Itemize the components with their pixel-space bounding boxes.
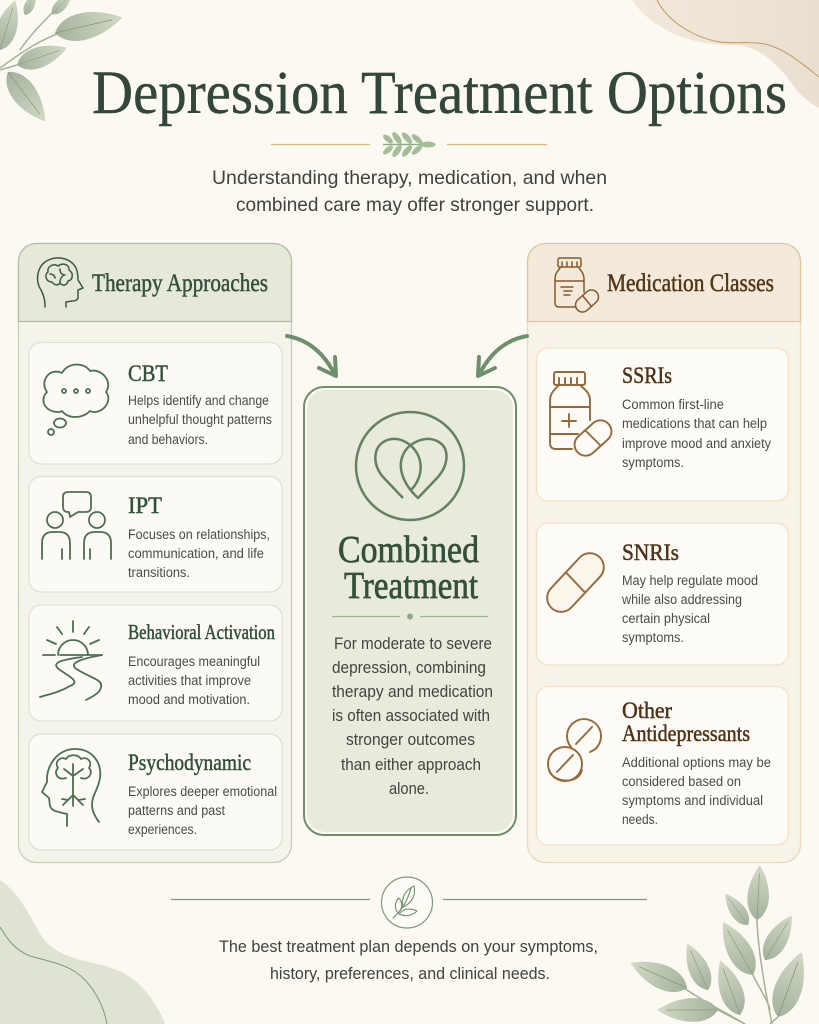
text: psychodynamic: Explores deeper emotional: [128, 784, 277, 799]
arrow: therapy to combined: [287, 336, 336, 376]
title divider with sprig: [271, 131, 547, 158]
text: other antidepressants: needs.: [622, 812, 658, 827]
footer text: The best treatment plan depends on your symptoms,: [219, 937, 598, 956]
icon: leaf sprig: [393, 886, 417, 918]
illustration: bottom right leaves: [625, 865, 814, 1024]
text: SSRIs: medications that can help: [622, 416, 767, 431]
text: CBT: unhelpful thought patterns: [128, 412, 272, 427]
card: other antidepressants: [536, 686, 788, 845]
panel: therapy approaches: [18, 244, 292, 862]
panel: medication classes: [528, 244, 800, 862]
text: IPT: communication, and life: [128, 546, 264, 561]
text: combined treatment description: is often associated with: [332, 707, 490, 725]
text: psychodynamic: experiences.: [128, 822, 197, 837]
icon: sunrise and path: [40, 621, 102, 700]
text: behavioral activation: Behavioral Activation: [128, 620, 275, 644]
card: behavioral activation: [29, 605, 282, 721]
text: other antidepressants: symptoms and individual: [622, 793, 763, 808]
decorative blob: bottom left: [0, 880, 165, 1024]
text: psychodynamic: Psychodynamic: [128, 750, 251, 775]
icon: capsule: [541, 547, 610, 618]
text: CBT: Helps identify and change: [128, 393, 269, 408]
icon: head with brain: [38, 258, 83, 307]
text: SNRIs: SNRIs: [622, 540, 679, 565]
heading: combined treatment: Treatment: [344, 565, 478, 607]
text: SSRIs: symptoms.: [622, 455, 684, 470]
footer text: [219, 937, 598, 983]
text: SSRIs: SSRIs: [622, 363, 672, 388]
text: SNRIs: May help regulate mood: [622, 573, 758, 588]
illustration: top left leaves: [0, 0, 125, 129]
text: SNRIs: symptoms.: [622, 630, 684, 645]
text: combined treatment description: [332, 635, 493, 798]
text: CBT: [128, 361, 272, 447]
card: SSRIs: [536, 348, 788, 501]
text: psychodynamic: [128, 750, 277, 837]
icon: bottle and pill: [555, 258, 601, 315]
card: SNRIs: [536, 523, 788, 665]
panel header: medication: [528, 244, 800, 322]
icon: round tablets: [548, 719, 601, 781]
card: psychodynamic: [29, 734, 282, 850]
text: combined treatment description: therapy and medication: [332, 683, 493, 701]
panel header: therapy: [18, 244, 292, 322]
subtitle: [212, 167, 607, 216]
icon: medicine bottle with capsule: [550, 372, 616, 460]
heading: therapy approaches: Therapy Approaches: [92, 270, 268, 297]
text: other antidepressants: Additional options may be: [622, 755, 771, 770]
text: SSRIs: [622, 363, 771, 470]
text: combined treatment description: depression, combining: [332, 659, 486, 677]
text: other antidepressants: Other: [622, 698, 672, 723]
heading: medication classes: Medication Classes: [607, 270, 774, 297]
text: behavioral activation: mood and motivation.: [128, 692, 250, 707]
card: CBT: [29, 342, 282, 464]
text: combined treatment description: For moderate to severe: [334, 635, 492, 653]
decorative blob: top right: [632, 0, 819, 108]
text: SNRIs: [621, 540, 758, 645]
text: behavioral activation: Encourages meaningful: [128, 654, 260, 669]
text: other antidepressants: considered based on: [622, 774, 741, 789]
icon: thought cloud: [43, 364, 108, 435]
card: IPT: [29, 476, 282, 592]
text: other antidepressants: Antidepressants: [622, 721, 750, 746]
subtitle: combined care may offer stronger support.: [236, 194, 594, 216]
text: combined treatment description: than either approach: [341, 756, 481, 774]
icon: two people talking: [42, 492, 111, 559]
footer divider with leaf badge: [171, 877, 647, 928]
heading: combined treatment: [338, 529, 479, 607]
text: other antidepressants: [622, 698, 771, 827]
text: combined treatment description: stronger outcomes: [346, 731, 475, 749]
text: IPT: Focuses on relationships,: [128, 527, 270, 542]
text: IPT: IPT: [128, 493, 162, 518]
text: combined treatment description: alone.: [389, 780, 429, 798]
text: IPT: transitions.: [128, 565, 190, 580]
text: psychodynamic: patterns and past: [128, 803, 225, 818]
text: SNRIs: certain physical: [622, 611, 710, 626]
subtitle: Understanding therapy, medication, and when: [212, 167, 607, 189]
text: IPT: [128, 493, 270, 580]
title: Depression Treatment Options: [92, 60, 787, 127]
text: behavioral activation: activities that improve: [128, 673, 251, 688]
footer text: history, preferences, and clinical needs.: [270, 964, 550, 983]
text: SNRIs: while also addressing: [621, 592, 742, 607]
text: CBT: and behaviors.: [128, 432, 208, 447]
icon: head with tree: [42, 749, 100, 826]
heading: combined treatment: Combined: [338, 529, 479, 571]
text: SSRIs: Common first-line: [622, 397, 724, 412]
icon: interlocked hearts in circle: [356, 412, 464, 520]
text: behavioral activation: [128, 620, 275, 707]
arrow: medication to combined: [478, 336, 527, 376]
text: CBT: CBT: [128, 361, 168, 386]
panel: combined treatment: [304, 387, 516, 835]
text: SSRIs: improve mood and anxiety: [622, 436, 771, 451]
divider with dot: [332, 614, 488, 620]
